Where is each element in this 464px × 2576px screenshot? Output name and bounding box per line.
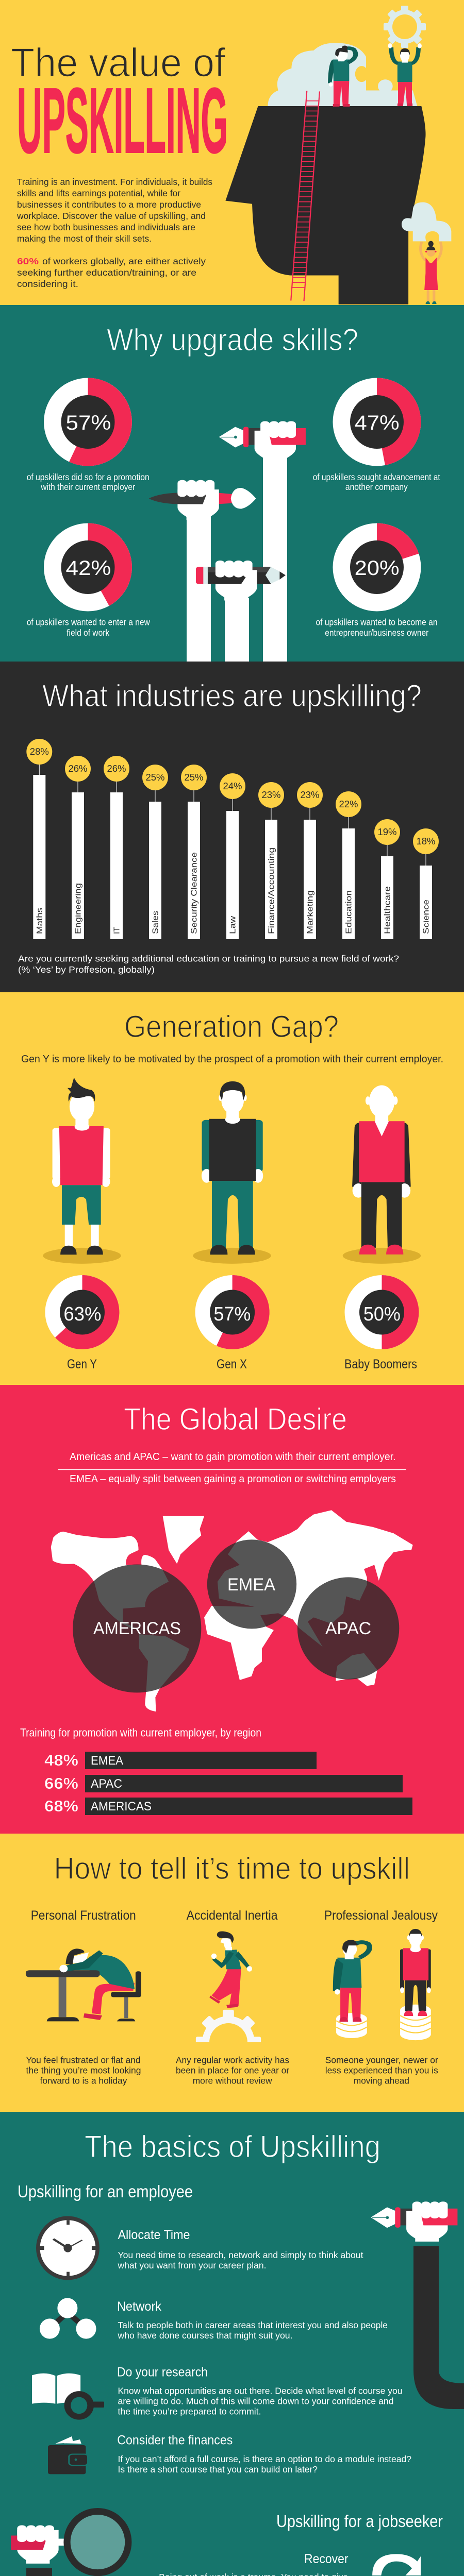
icon: clock xyxy=(36,2216,100,2280)
bar chart: upskilling by profession: 19% xyxy=(377,827,397,837)
caption: 42%: of upskillers wanted to enter a new xyxy=(27,617,150,628)
statistic paragraph: 60% of workers xyxy=(17,256,206,289)
icon: network xyxy=(40,2298,96,2339)
text: professional jealousy xyxy=(325,2055,438,2086)
bubble: AMERICAS xyxy=(73,1565,201,1692)
text: do your research: Know what opportunities are out there. Decide what level of course you xyxy=(118,2385,402,2396)
bar chart: upskilling by profession: 26% xyxy=(68,764,88,774)
text: do your research: the time you’re prepared to commit. xyxy=(118,2406,261,2416)
text: accidental inertia: more without review xyxy=(193,2075,272,2086)
text: accidental inertia: been in place for one year or xyxy=(176,2065,289,2075)
text: network: Talk to people both in career areas that interest you and also people xyxy=(118,2320,388,2330)
chart: 20% donut xyxy=(333,523,421,611)
map labels xyxy=(93,1575,371,1638)
bubble: APAC xyxy=(297,1577,399,1680)
panel: how to tell it's time to upskill xyxy=(0,1834,464,2112)
title: The value of: The value of xyxy=(11,40,225,85)
regional summary text: EMEA – equally split between gaining a promotion or switching employers xyxy=(70,1473,396,1485)
text: consider the finances xyxy=(117,2433,411,2475)
bar chart: upskilling by profession: 23% xyxy=(300,790,320,800)
text: personal frustration: You feel frustrated or flat and xyxy=(26,2055,140,2065)
map labels: APAC xyxy=(325,1619,371,1638)
intro paragraph: workplace. Discover the value of upskilling, and xyxy=(16,211,206,221)
bar chart: upskilling by profession: Marketing xyxy=(306,890,314,934)
intro paragraph: businesses it contributes to a more productive xyxy=(17,199,201,210)
bar chart: upskilling by profession: 23% xyxy=(262,790,280,800)
text: consider the finances: If you can’t afford a full course, is there an option to do a module instead? xyxy=(118,2454,411,2464)
heading: The basics of Upskilling: The basics of Upskilling xyxy=(85,2129,380,2164)
text: allocate time: Allocate Time xyxy=(118,2228,190,2242)
bar chart: upskilling by profession: 22% xyxy=(339,799,358,809)
world map with region bubbles xyxy=(51,1510,413,1711)
bar chart: upskilling by profession: Education xyxy=(344,890,354,934)
text: recover xyxy=(147,2552,349,2576)
text: recover: Recover xyxy=(304,2552,349,2566)
text: accidental inertia: Any regular work activity has xyxy=(176,2055,289,2065)
text: personal frustration: forward to is a holiday xyxy=(40,2075,127,2086)
bar chart: upskilling by profession: 25% xyxy=(185,772,203,783)
column titles xyxy=(31,1908,438,1923)
text: network xyxy=(117,2299,388,2341)
labels: generations: Gen X xyxy=(217,1357,247,1371)
panel: the global desire xyxy=(0,1385,464,1834)
intro paragraph: Training is an investment. For individuals, it builds xyxy=(17,177,212,187)
bar chart: upskilling by profession: Engineering xyxy=(74,883,82,934)
worker holding gear xyxy=(388,43,422,106)
bar chart: upskilling by profession: Healthcare xyxy=(384,886,392,934)
bar chart: promotion training by region: 66% xyxy=(44,1774,78,1792)
illustration: arm with pen xyxy=(371,2201,464,2409)
text: personal frustration xyxy=(26,2055,141,2086)
caption: 42% xyxy=(27,617,150,638)
subheading: Upskilling for a jobseeker: Upskilling for a jobseeker xyxy=(276,2512,443,2531)
statistic paragraph: 60% of workers: considering it. xyxy=(17,279,78,289)
text: professional jealousy: less experienced than you is xyxy=(325,2065,438,2075)
regional summary text xyxy=(58,1451,406,1485)
chart: 57% donut: 57% xyxy=(66,412,111,434)
text: do your research: Do your research xyxy=(117,2365,208,2380)
illustration: Baby Boomer person xyxy=(343,1085,421,1264)
bar chart: upskilling by profession: Maths xyxy=(36,908,44,934)
map labels: AMERICAS xyxy=(93,1619,181,1638)
text: do your research xyxy=(117,2365,402,2416)
chart: Gen Y 63% donut xyxy=(45,1275,120,1349)
caption: 20%: entrepreneur/business owner xyxy=(325,628,428,638)
text: do your research: are willing to do. Much of this will come down to your confidence and xyxy=(118,2396,394,2406)
icon: gear xyxy=(384,6,426,48)
chart: 47% donut: 47% xyxy=(355,412,400,434)
bar chart: upskilling by profession: Sales xyxy=(152,911,160,934)
labels: generations: Gen Y xyxy=(67,1357,97,1371)
heading: Why upgrade skills?: Why upgrade skills? xyxy=(107,323,358,357)
caption: 57%: of upskillers did so for a promotion xyxy=(27,472,150,482)
illustration: arm with magnifying glass xyxy=(0,2508,131,2576)
illustration: Gen Y person xyxy=(43,1077,121,1264)
chart: Baby Boomers 50% donut xyxy=(344,1275,419,1349)
heading: What industries are upskilling?: What industries are upskilling? xyxy=(42,679,422,713)
illustration: three raised hands with pen, brush and pencil xyxy=(149,421,306,662)
subheading text: Gen Y is more likely to be motivated by the prospect of a promotion with their current employer. xyxy=(21,1054,443,1065)
woman holding puzzle piece xyxy=(402,202,451,304)
panel: what industries are upskilling xyxy=(0,662,464,992)
bar chart: upskilling by profession: Security Clearance xyxy=(190,852,199,934)
bar chart: upskilling by profession: Science xyxy=(422,900,431,934)
labels: generations: Baby Boomers xyxy=(344,1357,417,1371)
subheading: Upskilling for an employee: Upskilling for an employee xyxy=(18,2182,193,2201)
column titles: Professional Jealousy xyxy=(324,1908,438,1923)
text: allocate time: what you want from your career plan. xyxy=(117,2260,266,2270)
column titles: Accidental Inertia xyxy=(187,1908,278,1923)
text: professional jealousy: Someone younger, newer or xyxy=(325,2055,438,2065)
heading: How to tell it’s time to upskill: How to tell it’s time to upskill xyxy=(54,1851,410,1886)
bubble: EMEA xyxy=(207,1539,296,1629)
illustration: colleagues on coin stacks xyxy=(333,1929,431,2040)
caption: 42%: field of work xyxy=(67,628,109,638)
intro paragraph: see how both businesses and individuals are xyxy=(17,222,195,232)
bar chart: upskilling by profession: 24% xyxy=(223,781,242,791)
text: network: Network xyxy=(117,2299,161,2314)
bar chart: upskilling by profession xyxy=(26,739,439,939)
text: network: who have done courses that might suit you. xyxy=(117,2330,292,2341)
text: allocate time: You need time to research, network and simply to think about xyxy=(118,2250,363,2260)
regional summary text: Americas and APAC – want to gain promotion with their current employer. xyxy=(70,1451,396,1463)
bar chart: promotion training by region: 48% xyxy=(44,1751,78,1769)
icon: book and magnifier xyxy=(32,2374,104,2420)
bar chart: upskilling by profession: 18% xyxy=(417,836,435,846)
statistic paragraph: 60% of workers: of workers globally, are either actively xyxy=(42,256,206,266)
caption: 20%: of upskillers wanted to become an xyxy=(316,617,437,628)
bar chart: promotion training by region: EMEA xyxy=(91,1754,123,1768)
panel: generation gap xyxy=(0,992,464,1385)
panel: the basics of upskilling xyxy=(0,2112,464,2576)
chart: 42% donut xyxy=(44,523,132,611)
bar chart: promotion training by region: APAC xyxy=(91,1777,122,1791)
heading: Generation Gap?: Generation Gap? xyxy=(124,1009,339,1044)
chart: 20% donut: 20% xyxy=(355,557,400,580)
caption: 47% xyxy=(313,472,440,492)
intro paragraph: making the most of their skill sets. xyxy=(17,233,152,244)
illustration: man stepping over half gear xyxy=(196,1931,261,2042)
text: consider the finances: Is there a short course that you can build on later? xyxy=(118,2464,318,2475)
chart: 47% donut xyxy=(333,378,421,466)
chart: Gen X 57% donut: 57% xyxy=(213,1303,251,1325)
caption: 57%: with their current employer xyxy=(40,482,135,492)
caption: 47%: of upskillers sought advancement at xyxy=(313,472,440,482)
column titles: Personal Frustration xyxy=(31,1908,136,1923)
caption: 20% xyxy=(316,617,437,638)
bar chart: promotion training by region xyxy=(44,1751,412,1815)
text: allocate time xyxy=(117,2228,363,2270)
text: personal frustration: the thing you’re most looking xyxy=(26,2065,141,2075)
bar chart: upskilling by profession: Finance/Accounting xyxy=(267,848,276,934)
bar chart heading: Training for promotion with current employer, by region xyxy=(20,1726,261,1739)
chart question text: (% ‘Yes’ by Proffesion, globally) xyxy=(18,964,155,975)
bar chart: upskilling by profession: 25% xyxy=(145,772,165,783)
panel: why upgrade skills xyxy=(0,305,464,662)
intro paragraph: skills and lifts earnings potential, while for xyxy=(17,188,180,198)
illustration: head with ladder, workers and puzzle pieces xyxy=(225,43,451,304)
worker scratching head xyxy=(328,46,356,107)
panel: intro header xyxy=(0,0,464,305)
bar chart: promotion training by region: AMERICAS xyxy=(91,1800,152,1814)
chart: 57% donut xyxy=(44,378,132,466)
caption: 47%: another company xyxy=(345,482,408,492)
chart: Gen Y 63% donut: 63% xyxy=(63,1303,101,1325)
labels: generations xyxy=(67,1357,417,1371)
bar chart: promotion training by region: 68% xyxy=(44,1797,78,1815)
caption: 57% xyxy=(27,472,150,492)
heading: The Global Desire: The Global Desire xyxy=(124,1402,347,1436)
icon: cycle arrows xyxy=(372,2554,421,2576)
statistic paragraph: 60% of workers: 60% xyxy=(17,256,39,266)
text: accidental inertia xyxy=(176,2055,289,2086)
icon: wallet xyxy=(48,2436,88,2474)
statistic paragraph: 60% of workers: seeking further education/training, or are xyxy=(17,267,196,278)
intro paragraph xyxy=(16,177,212,244)
bar chart: upskilling by profession: IT xyxy=(112,927,122,934)
text: consider the finances: Consider the finances xyxy=(117,2433,233,2447)
bar chart: upskilling by profession: Law xyxy=(229,916,237,934)
chart: Gen X 57% donut xyxy=(195,1275,270,1349)
chart: Baby Boomers 50% donut: 50% xyxy=(363,1303,401,1325)
chart: 42% donut: 42% xyxy=(66,557,111,580)
illustration: frustrated worker at desk xyxy=(26,1948,141,2021)
bar chart: upskilling by profession: 28% xyxy=(30,747,49,757)
illustration: Gen X person xyxy=(193,1081,271,1264)
chart question text: Are you currently seeking additional education or training to pursue a new field of work? xyxy=(18,953,399,963)
chart question text xyxy=(18,953,399,975)
bar chart: upskilling by profession: 26% xyxy=(107,764,126,774)
map labels: EMEA xyxy=(227,1575,275,1595)
text: professional jealousy: moving ahead xyxy=(354,2075,409,2086)
